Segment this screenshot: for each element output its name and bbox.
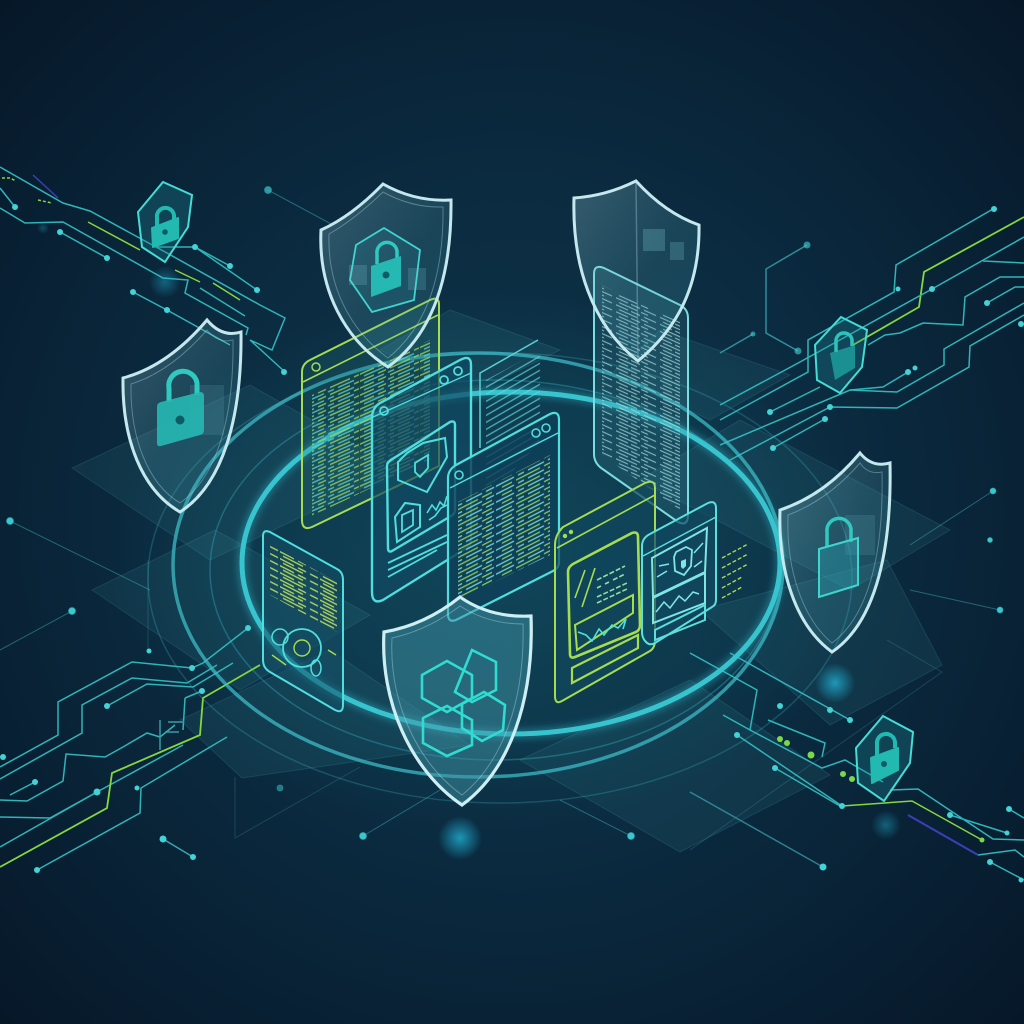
icon: shield with padlock, right [780,453,890,652]
glow spots under shields [37,222,901,860]
panel: left gear code window [263,531,343,711]
circuit traces: lower left [0,625,260,873]
icon: small hexagon lock, upper left [138,182,192,262]
panel: central code window [448,413,559,621]
circuit traces: upper right [720,206,1024,460]
icon: shield with document, top right [574,181,699,361]
icon: shield with padlock, left [123,320,241,512]
circuit traces: lower right [690,653,1024,882]
isometric floor tiles [72,310,950,852]
central glow [110,290,870,830]
panel: lime code window [302,299,439,528]
panel: shield diagram window [372,358,471,601]
panel: faint back code window [480,340,560,500]
panel: right tall code window [594,267,688,523]
concentric rings [148,353,852,803]
icon: shield with hexagon lock, top centre [321,184,451,367]
panel: right dashboard window [642,502,748,644]
floor tile outlines [148,560,942,850]
icon: small hexagon lock, lower right [856,716,913,801]
icon: shield with hexagon cluster, bottom [384,597,531,805]
icon: small hexagon lock, right [815,317,867,393]
circuit traces: upper left [0,167,287,375]
panel: lime terminal window [555,482,655,702]
scattered network nodes [0,186,1003,840]
